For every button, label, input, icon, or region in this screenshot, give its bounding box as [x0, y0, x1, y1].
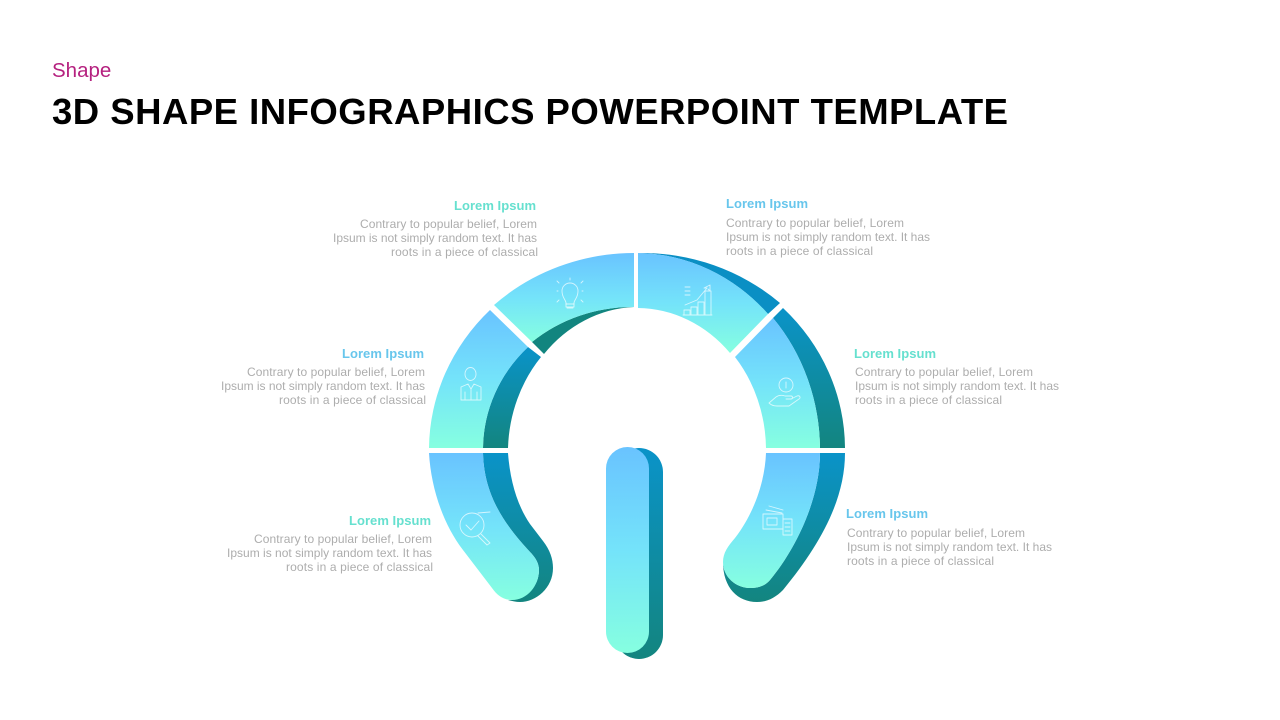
text block: top left: Contrary to popular belief, Lorem [360, 217, 537, 231]
text block: bottom right: roots in a piece of classical [847, 554, 994, 568]
text block: top right: Ipsum is not simply random text. It has [726, 230, 930, 244]
text block: top right: Lorem Ipsum [726, 196, 808, 211]
icon: hand holding coin [769, 378, 800, 406]
icon: wallet and cash [763, 506, 792, 535]
text block: top left: Lorem Ipsum [454, 198, 536, 213]
segment: top right [638, 253, 780, 353]
text block: middle right: Contrary to popular belief, Lorem [855, 365, 1033, 379]
text block: middle left: Ipsum is not simply random text. It has [221, 379, 425, 393]
icon: magnifier with check [460, 512, 490, 545]
icon: business person [461, 368, 481, 400]
segment: bottom right [723, 453, 845, 602]
subtitle: Shape [52, 59, 111, 82]
text block: bottom left: Lorem Ipsum [349, 513, 431, 528]
segment: middle right [735, 308, 845, 448]
text block: bottom right: Contrary to popular belief, Lorem [847, 526, 1025, 540]
text block: bottom left: Contrary to popular belief, Lorem [254, 532, 432, 546]
text block: middle left: Lorem Ipsum [342, 346, 424, 361]
text block: top left: Ipsum is not simply random text. It has [333, 231, 537, 245]
text block: middle left: Contrary to popular belief, Lorem [247, 365, 425, 379]
text block: top left: roots in a piece of classical [391, 245, 538, 259]
text block: top right: roots in a piece of classical [726, 244, 873, 258]
text block: bottom left [227, 513, 433, 574]
text block: bottom left: Ipsum is not simply random text. It has [227, 546, 432, 560]
text block: bottom left: roots in a piece of classical [286, 560, 433, 574]
center pill [606, 447, 663, 659]
segment: bottom left [429, 453, 553, 602]
text block: middle right: Ipsum is not simply random text. It has [855, 379, 1059, 393]
text block: bottom right: Lorem Ipsum [846, 506, 928, 521]
segment: middle left [429, 310, 541, 448]
text block: top right [726, 196, 930, 258]
text block: middle right [854, 346, 1059, 407]
icon: light bulb [557, 278, 583, 308]
icon: growth chart [683, 285, 712, 315]
title: 3D SHAPE INFOGRAPHICS POWERPOINT TEMPLATE [52, 91, 1008, 132]
text block: middle right: Lorem Ipsum [854, 346, 936, 361]
text block: bottom right [846, 506, 1052, 568]
text block: middle left [221, 346, 426, 407]
text block: middle left: roots in a piece of classical [279, 393, 426, 407]
text block: top right: Contrary to popular belief, Lorem [726, 216, 904, 230]
text block: middle right: roots in a piece of classical [855, 393, 1002, 407]
text block: bottom right: Ipsum is not simply random text. It has [847, 540, 1052, 554]
text block: top left [333, 198, 538, 259]
segment: top left [494, 253, 634, 354]
